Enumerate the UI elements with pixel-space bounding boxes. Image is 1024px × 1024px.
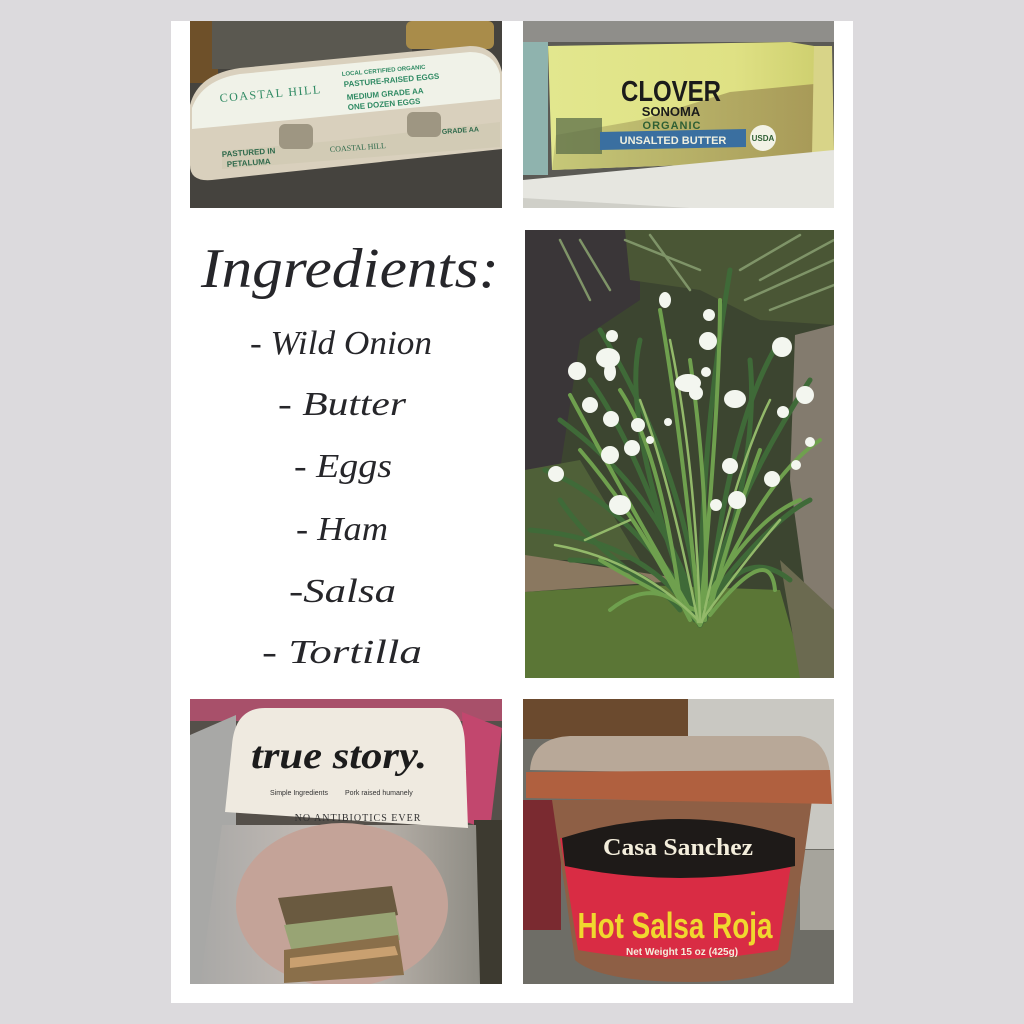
item: wild onion: - Wild Onion <box>250 325 432 362</box>
package claims: Simple Ingredients <box>270 790 328 797</box>
icon: usda seal <box>750 125 776 151</box>
ferns <box>560 235 834 310</box>
item: ham: - Ham <box>296 511 388 548</box>
package claims <box>270 790 413 797</box>
photo: salsa container <box>523 699 834 984</box>
package claims: Pork raised humanely <box>345 790 413 797</box>
butter banner: UNSALTED BUTTER <box>620 135 726 147</box>
carton logo text: COASTAL HILL <box>219 82 322 105</box>
carton lower text: GRADE AA <box>442 126 479 136</box>
butter organic: ORGANIC <box>643 120 701 132</box>
brand name: true story. <box>251 735 427 777</box>
photo: wild onion plant <box>525 230 834 678</box>
flowers <box>548 292 815 515</box>
photo: ham package <box>190 699 502 987</box>
salsa product name: Hot Salsa Roja <box>578 905 773 946</box>
carton label text: MEDIUM GRADE AA <box>346 86 424 102</box>
carton lower text: PASTURED IN <box>222 146 276 159</box>
icon: usda seal: USDA <box>752 134 775 143</box>
leaves <box>530 270 820 625</box>
carton lower text: PETALUMA <box>227 157 271 169</box>
item: tortilla: - Tortilla <box>262 634 422 671</box>
item: eggs: - Eggs <box>294 448 392 485</box>
item: salsa: -Salsa <box>289 573 396 610</box>
photo: butter box <box>523 21 834 208</box>
ingredient list <box>250 325 432 671</box>
photo: egg carton <box>190 21 502 208</box>
salsa brand: Casa Sanchez <box>603 835 753 861</box>
background card <box>171 21 853 1003</box>
package tagline: NO ANTIBIOTICS EVER <box>295 813 421 824</box>
item: butter: - Butter <box>278 386 407 423</box>
carton label text: ONE DOZEN EGGS <box>347 97 421 112</box>
carton lower text: COASTAL HILL <box>330 141 386 154</box>
carton label text: PASTURE-RAISED EGGS <box>343 72 440 89</box>
butter subbrand: SONOMA <box>642 104 701 119</box>
package label <box>225 708 468 828</box>
sandwich illustration <box>278 886 404 983</box>
butter brand: CLOVER <box>621 76 721 108</box>
carton label text: LOCAL CERTIFIED ORGANIC <box>342 65 426 78</box>
salsa weight: Net Weight 15 oz (425g) <box>626 947 738 958</box>
heading: ingredients: Ingredients: <box>200 238 499 300</box>
carton lower text <box>222 126 479 169</box>
carton label text <box>342 65 440 112</box>
